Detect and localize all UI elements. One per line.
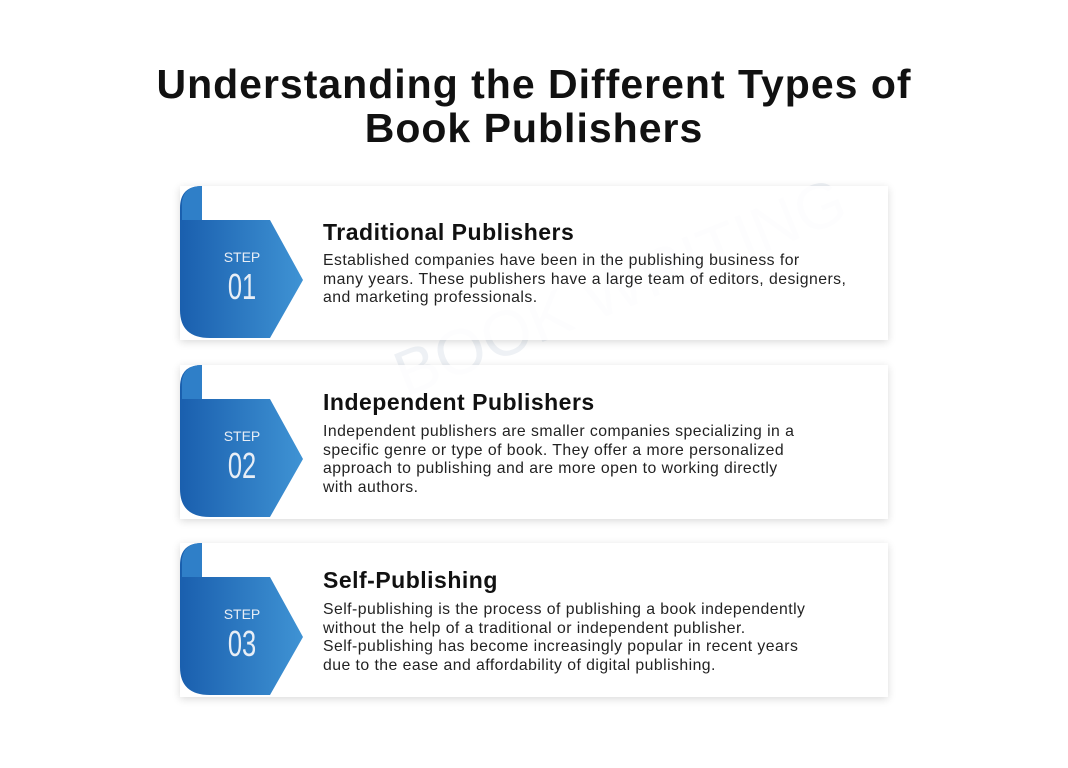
icon: step 01 badge: 01 (228, 267, 256, 307)
text: without the help of a traditional or independent publisher. (323, 620, 746, 636)
icon: step 03 badge: STEP (224, 606, 260, 622)
icon: step 02 badge (180, 365, 303, 517)
text: with authors. (323, 478, 418, 496)
text: Independent publishers are smaller companies specializing in a (323, 423, 794, 440)
icon: step 02 badge: STEP (224, 428, 260, 444)
panel: independent publishers (180, 365, 888, 519)
heading: Traditional Publishers (323, 219, 574, 245)
title: Understanding the Different Types of (156, 61, 912, 107)
text: approach to publishing and are more open to working directly (323, 460, 778, 477)
panel: self-publishing (180, 543, 888, 697)
text: and marketing professionals. (323, 289, 538, 306)
icon: step 01 badge: STEP (224, 249, 260, 265)
icon: step 03 badge: 03 (228, 624, 256, 664)
text (323, 601, 805, 674)
watermark: BOOK WRITING (384, 164, 856, 410)
icon: step 01 badge (180, 186, 303, 338)
title: Book Publishers (365, 105, 703, 151)
text: Self-publishing is the process of publishing a book independently (323, 601, 805, 618)
heading: Independent Publishers (323, 389, 595, 415)
panel: traditional publishers (180, 186, 888, 340)
text (323, 252, 846, 306)
text: due to the ease and affordability of digital publishing. (323, 656, 716, 674)
text: many years. These publishers have a large team of editors, designers, (323, 270, 846, 288)
text: Self-publishing has become increasingly popular in recent years (323, 638, 798, 655)
icon: step 03 badge (180, 543, 303, 695)
icon: step 02 badge: 02 (228, 446, 256, 486)
heading: Self-Publishing (323, 567, 498, 593)
text (323, 423, 794, 496)
text: specific genre or type of book. They offer a more personalized (323, 442, 784, 458)
title (156, 61, 912, 151)
text: Established companies have been in the publishing business for (323, 252, 800, 269)
